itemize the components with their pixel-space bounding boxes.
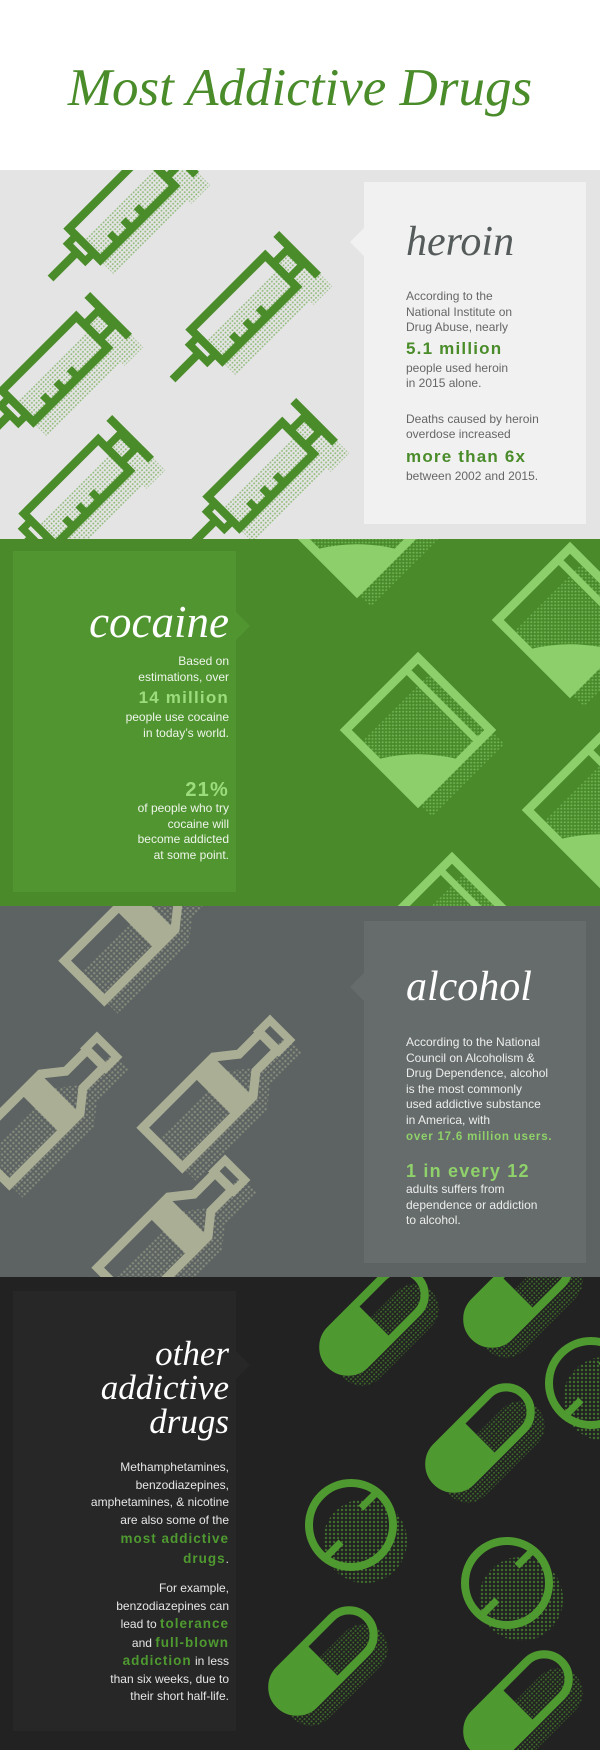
body text: other drugs: Methamphetamines, <box>120 1460 229 1474</box>
bottle icons <box>0 906 301 1277</box>
heading: other addictive drugs: addictive <box>101 1368 229 1407</box>
body text: other drugs: and full-blown <box>132 1634 229 1650</box>
text box: heroin <box>364 182 586 524</box>
stats text: alcohol: adults suffers from <box>406 1182 504 1196</box>
stats text: heroin: overdose increased <box>406 427 511 441</box>
bag icons <box>298 539 600 906</box>
title: Most Addictive Drugs <box>68 59 532 117</box>
body text: other drugs: benzodiazepines, <box>136 1478 229 1492</box>
heading: other addictive drugs <box>101 1334 230 1441</box>
body text: other drugs: benzodiazepines can <box>116 1598 229 1612</box>
body text: other drugs: addiction in less <box>123 1653 229 1668</box>
stats text: alcohol: 1 in every 12 <box>406 1161 530 1181</box>
panel: heroin <box>0 170 600 539</box>
stats text: cocaine: cocaine will <box>168 816 229 830</box>
pill icons <box>268 1277 600 1750</box>
stats text: cocaine: of people who try <box>138 801 229 815</box>
heading: other addictive drugs: other <box>155 1334 229 1373</box>
panel: cocaine <box>0 539 600 906</box>
body text: other drugs: their short half-life. <box>130 1689 229 1703</box>
stats text: cocaine: estimations, over <box>138 670 229 684</box>
heading: heroin: heroin <box>406 219 514 265</box>
stats text: cocaine: 21% <box>185 779 229 801</box>
body text: other drugs: most addictive <box>120 1531 229 1546</box>
stats text: heroin: Drug Abuse, nearly <box>406 320 508 334</box>
stats text: cocaine: people use cocaine <box>126 710 229 724</box>
body text: other drugs <box>91 1460 229 1703</box>
stats text: heroin: people used heroin <box>406 360 508 374</box>
heading: alcohol: alcohol <box>406 964 532 1010</box>
text box: cocaine <box>13 551 236 892</box>
stats text: heroin: 5.1 million <box>406 338 502 358</box>
stats text: alcohol: dependence or addiction <box>406 1198 537 1212</box>
text box: alcohol <box>364 921 586 1263</box>
heading: cocaine: cocaine <box>89 597 229 647</box>
stats text: alcohol: According to the National <box>406 1035 540 1049</box>
body text: other drugs: are also some of the <box>120 1512 229 1526</box>
stats text: heroin: According to the <box>406 289 493 303</box>
stats text: heroin: Deaths caused by heroin <box>406 412 539 426</box>
stats text: heroin: between 2002 and 2015. <box>406 468 538 482</box>
panel: alcohol <box>0 906 600 1277</box>
heading: other addictive drugs: drugs <box>149 1402 229 1441</box>
stats text: cocaine: at some point. <box>154 848 229 862</box>
stats text: alcohol: in America, with <box>406 1112 490 1126</box>
stats text: heroin: National Institute on <box>406 304 512 318</box>
stats text: alcohol <box>406 1035 552 1227</box>
stats text: heroin: more than 6x <box>406 446 526 466</box>
stats text: alcohol: is the most commonly <box>406 1082 522 1096</box>
stats text: alcohol: Council on Alcoholism & <box>406 1050 535 1064</box>
body text: other drugs: lead to tolerance <box>121 1616 229 1631</box>
stats text: cocaine <box>126 654 229 862</box>
stats text: heroin: in 2015 alone. <box>406 376 481 390</box>
syringe icons <box>0 170 350 539</box>
stats text: cocaine: Based on <box>178 654 229 668</box>
stats text: alcohol: to alcohol. <box>406 1213 461 1227</box>
stats text: alcohol: over 17.6 million users. <box>406 1131 552 1143</box>
text box: other drugs <box>13 1291 236 1731</box>
stats text: cocaine: become addicted <box>138 832 229 846</box>
stats text: alcohol: Drug Dependence, alcohol <box>406 1066 548 1080</box>
stats text: alcohol: used addictive substance <box>406 1097 541 1111</box>
body text: other drugs: amphetamines, & nicotine <box>91 1495 229 1509</box>
stats text: cocaine: 14 million <box>139 688 229 707</box>
body text: other drugs: drugs. <box>183 1550 229 1566</box>
body text: other drugs: than six weeks, due to <box>110 1672 229 1686</box>
stats text: heroin <box>406 289 539 482</box>
panel: other addictive drugs <box>0 1277 600 1750</box>
body text: other drugs: For example, <box>159 1581 229 1595</box>
stats text: cocaine: in today’s world. <box>143 726 229 740</box>
